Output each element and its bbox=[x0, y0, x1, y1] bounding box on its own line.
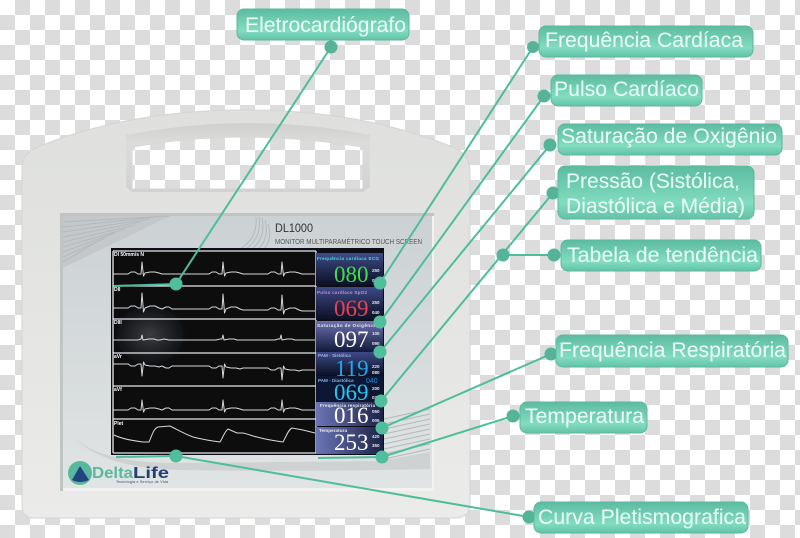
model description: MONITOR MULTIPARAMÉTRICO TOUCH SCREEN bbox=[275, 237, 422, 246]
readout: frequência respiratória: 005 bbox=[372, 418, 380, 423]
lead labels: aVr bbox=[114, 354, 122, 360]
lead labels: aVf bbox=[114, 387, 122, 393]
readout: saturação bbox=[316, 321, 383, 352]
readout: pulso cardíaco: 040 bbox=[372, 310, 380, 315]
handle recess bbox=[126, 123, 370, 192]
callout: Saturação de Oxigênio bbox=[374, 124, 782, 358]
callout: Pulso Cardíaco bbox=[374, 75, 702, 328]
lead DI bbox=[113, 262, 315, 276]
callout: Frequência Respiratória: Frequência Respiratória bbox=[559, 339, 786, 362]
callout: Saturação de Oxigênio: Saturação de Oxigênio bbox=[561, 125, 777, 148]
lead labels: DI 50mm/s N bbox=[114, 252, 144, 258]
readout: frequência cardíaca: 250 bbox=[372, 268, 380, 273]
readout: pressão: 220 bbox=[372, 364, 380, 369]
readout: pressão: 080 bbox=[372, 370, 380, 375]
readout: pressão bbox=[316, 352, 383, 405]
readout: temperatura: 350 bbox=[372, 443, 380, 448]
bottom swoosh bbox=[64, 425, 430, 471]
screen bbox=[111, 248, 384, 455]
callout: Eletrocardiógrafo bbox=[114, 9, 409, 290]
readout: frequência cardíaca: 080 bbox=[334, 262, 368, 287]
logo: DeltaLife: Life bbox=[133, 465, 169, 482]
callout: Tabela de tendência bbox=[496, 240, 761, 271]
logo: DeltaLife: Tecnologia e Serviço de Vida bbox=[116, 480, 168, 484]
hatch top left bbox=[63, 216, 170, 268]
lead labels: DII bbox=[114, 287, 121, 293]
callout: Tabela de tendência: Tabela de tendência bbox=[567, 244, 758, 267]
hatch bottom right bbox=[384, 409, 430, 459]
readout: pressão: 030 bbox=[372, 395, 380, 400]
callout: Frequência Cardíaca: Frequência Cardíaca bbox=[545, 29, 743, 52]
monitor device bbox=[22, 110, 470, 518]
readout: frequência respiratória: Frequência respiratória bbox=[320, 403, 375, 408]
callout: Pulso Cardíaco: Pulso Cardíaco bbox=[554, 78, 699, 101]
readout: frequência respiratória: 016 bbox=[334, 403, 368, 428]
readout: saturação: Saturação de Oxigênio bbox=[317, 323, 375, 328]
readout: pulso cardíaco: 250 bbox=[372, 300, 380, 305]
readout: pressão: 040 bbox=[366, 378, 378, 385]
lead aVf bbox=[113, 400, 315, 412]
model name: DL1000 bbox=[275, 221, 313, 235]
callout: Temperatura: Temperatura bbox=[525, 405, 644, 428]
callout: Curva Pletismografica: Curva Pletismografica bbox=[538, 506, 746, 529]
readout: temperatura bbox=[316, 427, 383, 455]
readout: saturação: 097 bbox=[334, 327, 368, 352]
lead DIII bbox=[113, 335, 315, 340]
callout: Curva Pletismografica bbox=[116, 450, 748, 533]
readout: pressão: PAM - Diastólica bbox=[318, 378, 354, 383]
logo: DeltaLife bbox=[68, 461, 169, 485]
hatch top centre bbox=[240, 217, 270, 249]
pleth curve bbox=[114, 426, 315, 442]
readout: pulso cardíaco: 069 bbox=[334, 296, 368, 321]
readout: pressão: 119 bbox=[335, 356, 369, 381]
callout: Frequência Cardíaca bbox=[374, 26, 753, 290]
readout: saturação: 090 bbox=[372, 341, 380, 346]
readout: pulso cardíaco: Pulso cardíaco SpO2 bbox=[317, 290, 367, 295]
readout: frequência cardíaca bbox=[316, 253, 383, 287]
lead aVr bbox=[113, 362, 315, 380]
lead labels: DIII bbox=[114, 320, 122, 326]
waveform area bbox=[112, 251, 316, 453]
readout: saturação: 100 bbox=[372, 331, 380, 336]
readout: temperatura: 420 bbox=[372, 434, 380, 439]
readout: frequência cardíaca: 050 bbox=[372, 278, 380, 283]
readout: frequência cardíaca: Frequência cardíaca ECG bbox=[317, 256, 379, 261]
readout: temperatura: 253 bbox=[334, 430, 368, 455]
callout: Eletrocardiógrafo: Eletrocardiógrafo bbox=[245, 14, 406, 37]
device casing with handle bbox=[22, 110, 470, 518]
readout: temperatura: Temperatura bbox=[319, 428, 347, 433]
lead DII bbox=[113, 293, 315, 314]
readout: pressão: 200 bbox=[372, 386, 380, 391]
logo: DeltaLife: Delta bbox=[92, 465, 133, 482]
callout: Temperatura bbox=[318, 402, 647, 464]
lead labels: Plet bbox=[114, 421, 124, 427]
callout: Pressão: Diastólica e Média) bbox=[566, 195, 745, 218]
callout: Pressão: Pressão (Sistólica, bbox=[566, 170, 740, 193]
callout: Frequência Respiratória bbox=[376, 335, 788, 434]
readout: frequência respiratória: 050 bbox=[372, 409, 380, 414]
callout: Pressão bbox=[374, 166, 754, 408]
lead labels bbox=[114, 252, 144, 427]
readout: pressão: 069 bbox=[334, 380, 368, 405]
readout: pulso cardíaco bbox=[316, 287, 383, 321]
readout: frequência respiratória bbox=[316, 402, 383, 428]
front panel bbox=[60, 213, 434, 491]
readout: pressão: PAM - Sistólica bbox=[318, 353, 351, 358]
